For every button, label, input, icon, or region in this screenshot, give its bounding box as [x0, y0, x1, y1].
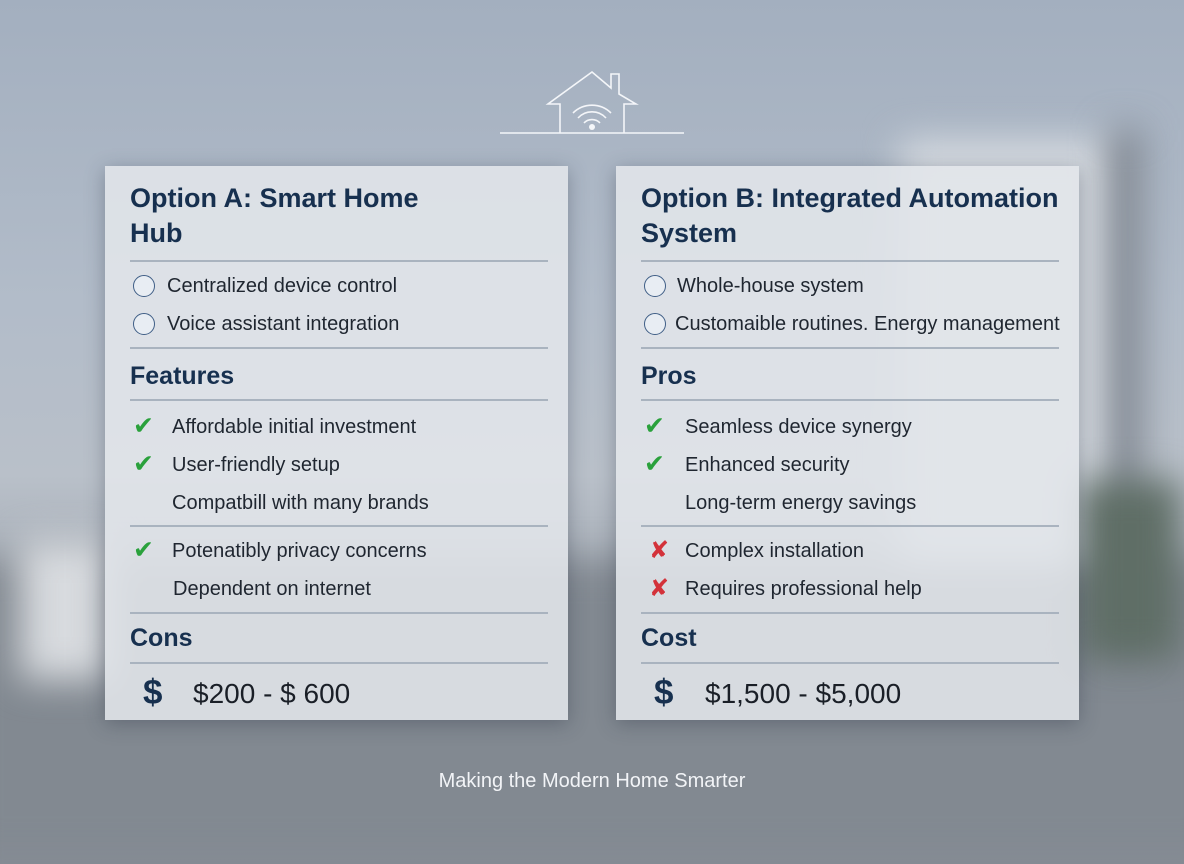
icon: device control — [133, 275, 155, 297]
panel: option B: Whole-house system — [677, 275, 864, 297]
heading: option A title: Option A: Smart Home — [130, 183, 419, 213]
panel: option A: ✔ — [133, 449, 154, 478]
panel: option B: Customaible routines. Energy management — [675, 313, 1060, 335]
panel: option A: ✔ — [133, 535, 154, 564]
panel: option B: Long-term energy savings — [685, 492, 916, 514]
icon: routines — [644, 313, 666, 335]
panel: option B: Enhanced security — [685, 454, 850, 476]
icon: dollar: $ — [654, 673, 673, 712]
panel: option A: Dependent on internet — [173, 578, 371, 600]
panel: option B: Requires professional help — [685, 578, 922, 600]
heading: option A title — [130, 183, 419, 248]
heading: option B title — [641, 183, 1058, 248]
panel: option B — [616, 166, 1079, 720]
panel: option B: Complex installation — [685, 540, 864, 562]
heading: features: Features — [130, 362, 234, 390]
text: cost B: $1,500 - $5,000 — [705, 678, 901, 709]
panel: option A: Centralized device control — [167, 275, 397, 297]
text: cost A: $200 - $ 600 — [193, 678, 350, 709]
heading: pros: Pros — [641, 362, 697, 390]
panel: option B: Seamless device synergy — [685, 416, 912, 438]
panel: option B: ✘ — [649, 574, 669, 602]
heading: option B title: System — [641, 218, 737, 248]
panel: option A: Potenatibly privacy concerns — [172, 540, 427, 562]
panel: option B: ✔ — [644, 449, 665, 478]
panel: option A: ✔ — [133, 411, 154, 440]
panel: option A: Affordable initial investment — [172, 416, 416, 438]
panel: option A — [105, 166, 568, 720]
icon: dollar: $ — [143, 673, 162, 712]
panel: option A: Compatbill with many brands — [172, 492, 429, 514]
heading: option B title: Option B: Integrated Automation — [641, 183, 1058, 213]
icon: voice — [133, 313, 155, 335]
panel: option B: ✔ — [644, 411, 665, 440]
heading: cost: Cost — [641, 624, 697, 652]
heading: option A title: Hub — [130, 218, 182, 248]
panel: option A: User-friendly setup — [172, 454, 340, 476]
panel: option B: ✘ — [649, 536, 669, 564]
footer caption: Making the Modern Home Smarter — [439, 770, 745, 792]
heading: cons: Cons — [130, 624, 192, 652]
panel: option A: Voice assistant integration — [167, 313, 399, 335]
icon: whole house — [644, 275, 666, 297]
icon: house with wifi — [500, 71, 684, 134]
